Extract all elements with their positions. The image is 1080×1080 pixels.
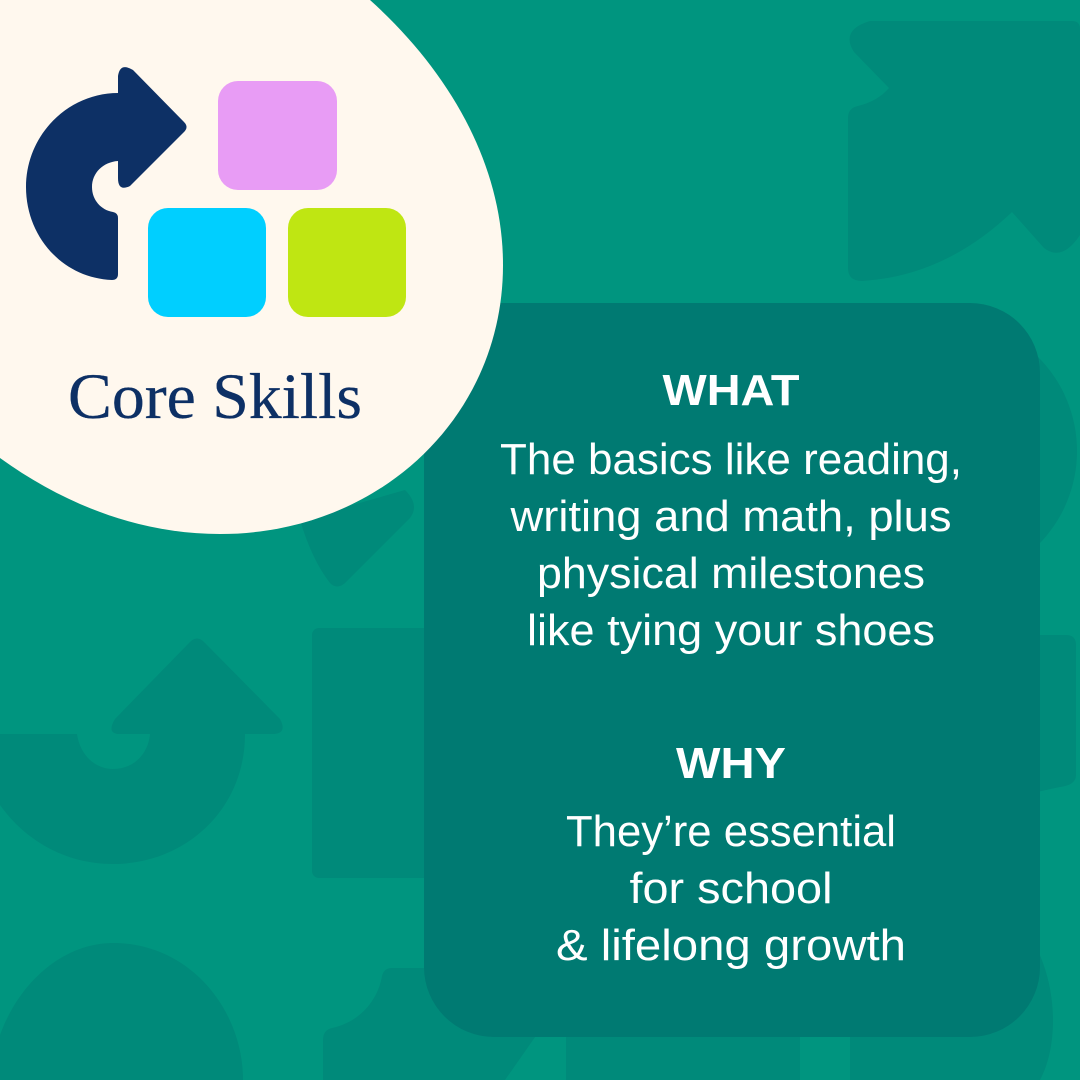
text block: what description: physical milestones — [537, 549, 925, 598]
background block: bottom centre — [566, 1000, 800, 1080]
background circle: right — [811, 318, 1077, 584]
title: Core Skills — [68, 361, 362, 433]
heading: what: WHAT — [662, 366, 800, 415]
background arrow: bottom centre — [323, 968, 540, 1080]
background arrow: top right — [848, 21, 1080, 281]
text block: why description: & lifelong growth — [556, 921, 906, 970]
background circle: bottom left — [0, 943, 243, 1080]
text block: what description: The basics like reading, — [500, 435, 962, 484]
background block: centre left — [312, 628, 512, 878]
text block: what description — [500, 435, 962, 655]
background arrow: bottom right — [850, 900, 1053, 1080]
text block: why description: for school — [630, 864, 832, 913]
background block: right — [1000, 635, 1076, 800]
icon: blue block — [148, 208, 266, 317]
background arrow tip: under circle — [300, 490, 414, 586]
icon: pink block — [218, 81, 337, 190]
text block: why description: They’re essential — [566, 807, 896, 856]
cream circle badge — [0, 0, 503, 534]
text block: why description — [556, 807, 906, 970]
background arrow: middle left — [0, 638, 283, 864]
text block: what description: writing and math, plus — [509, 492, 952, 541]
icon: green block — [288, 208, 406, 317]
panel: what and why — [424, 303, 1040, 1037]
icon: curved arrow — [26, 67, 186, 280]
text block: what description: like tying your shoes — [527, 606, 935, 655]
heading: why: WHY — [676, 739, 786, 788]
